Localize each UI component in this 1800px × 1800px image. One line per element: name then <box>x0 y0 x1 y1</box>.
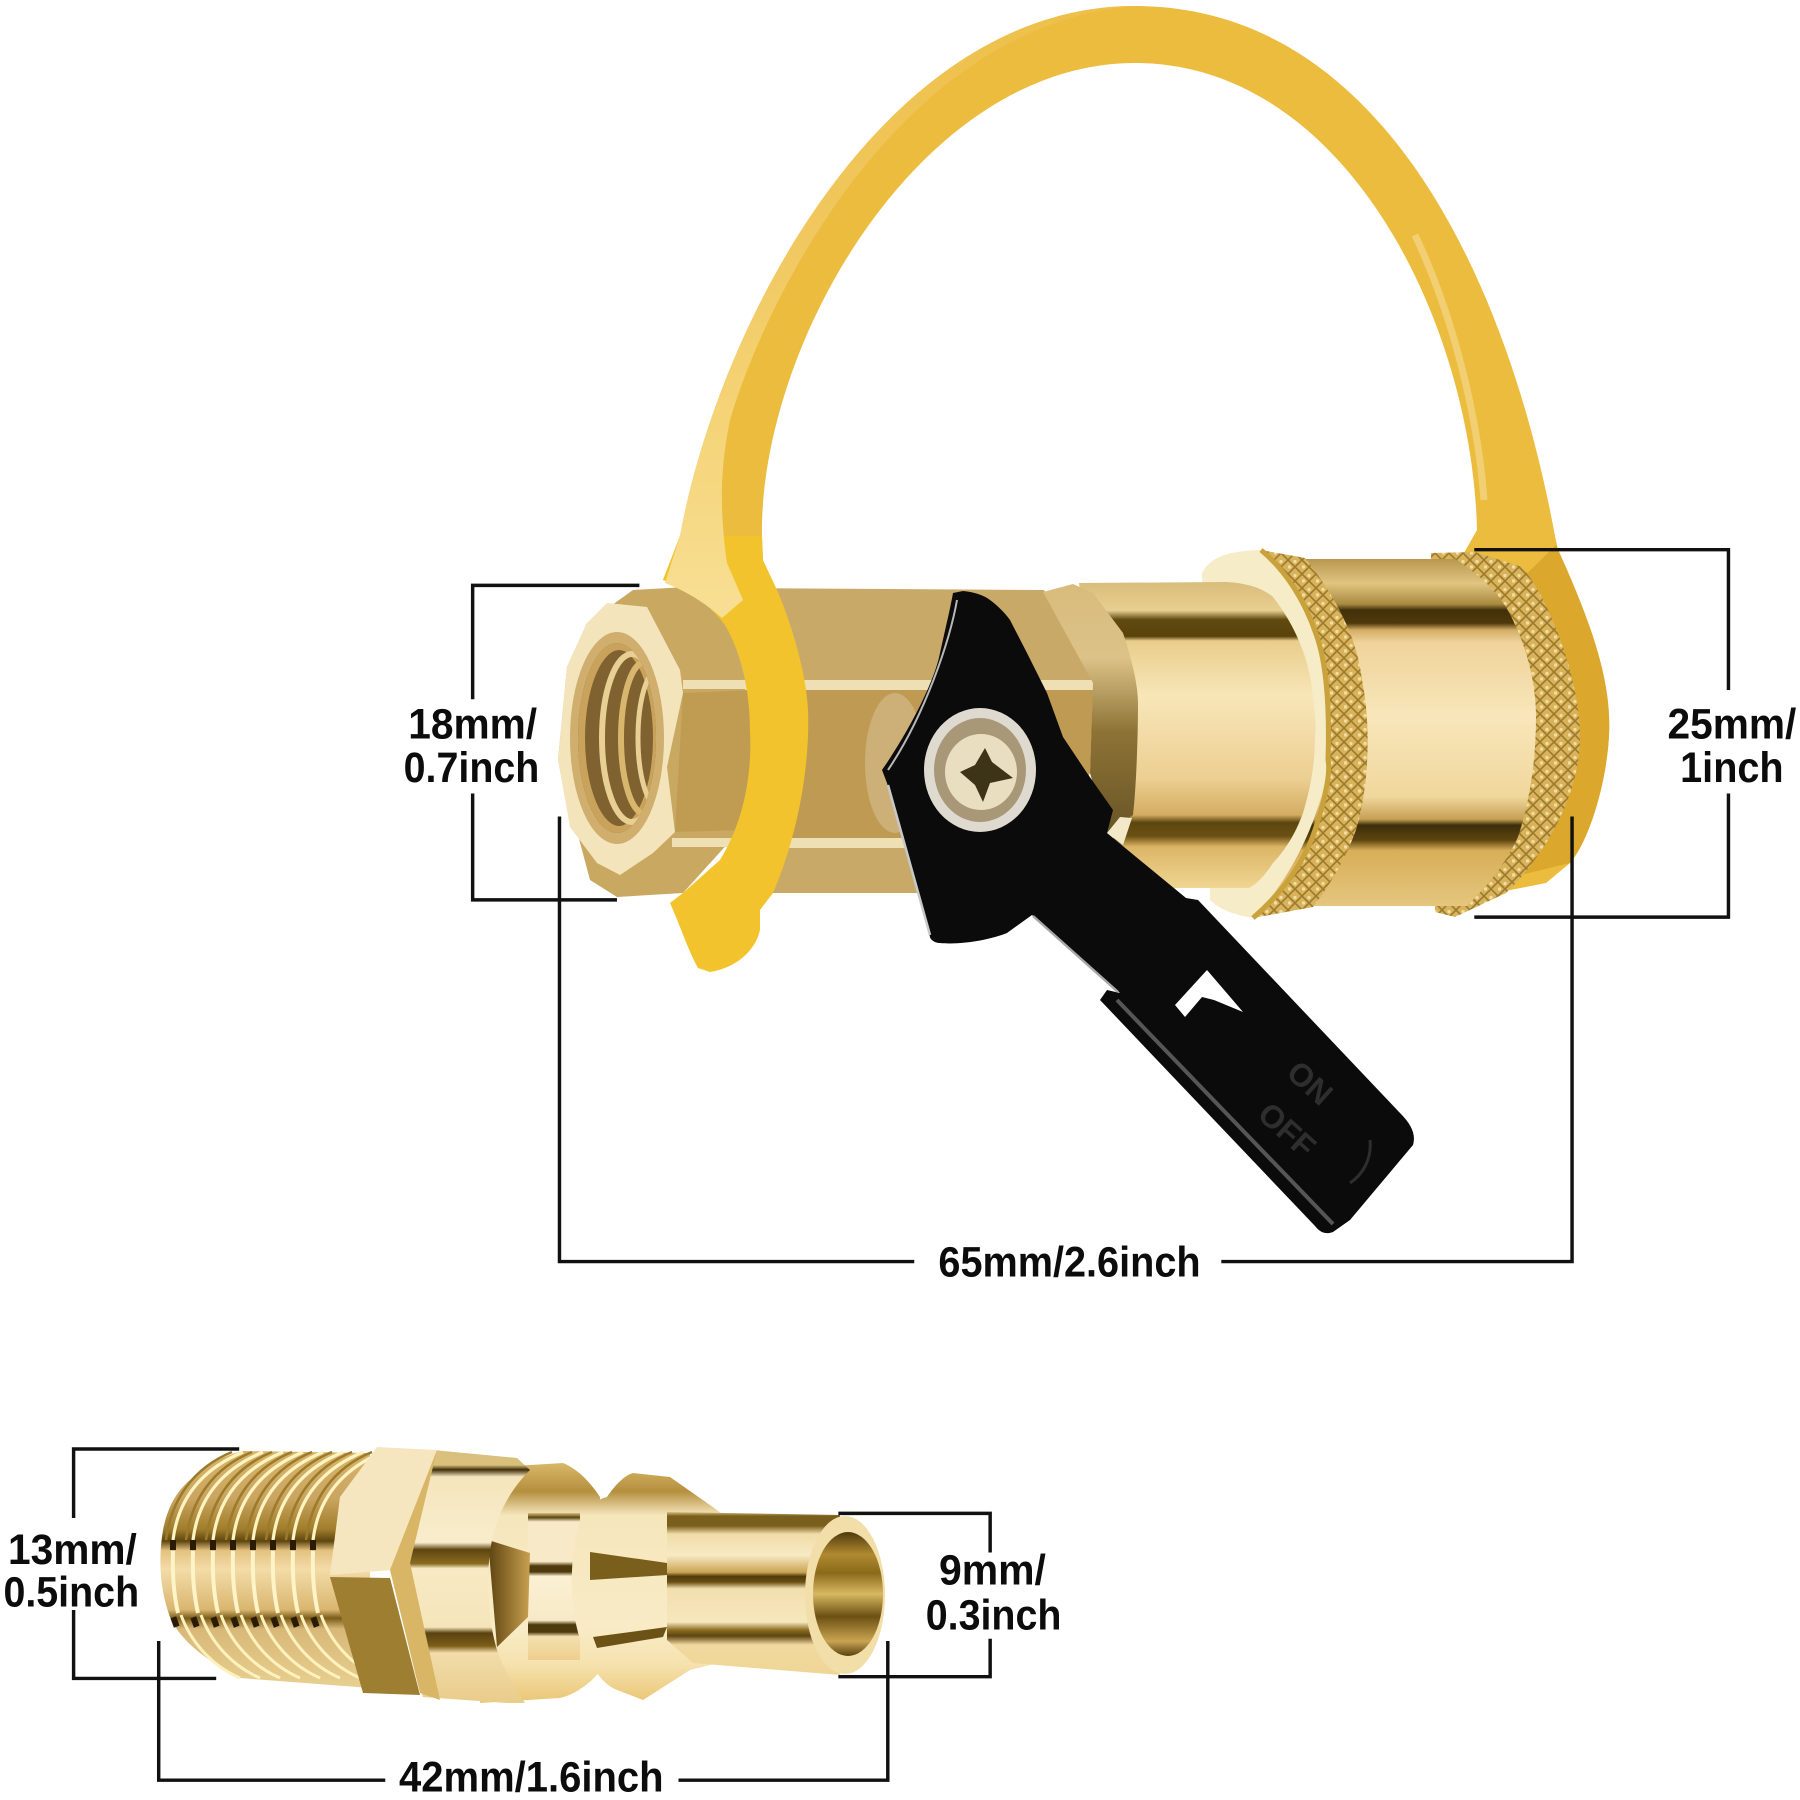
inner dark wedge <box>488 1540 530 1647</box>
yellow loop strap <box>663 6 1609 900</box>
flared shoulder <box>572 1473 730 1700</box>
front coupler cylinder <box>1079 582 1316 888</box>
rear knurled collar <box>1431 552 1580 917</box>
tube end <box>805 1516 885 1674</box>
dimension: 18mm <box>404 585 639 900</box>
lever window <box>1175 970 1243 1017</box>
dimension: 25mm: 25mm/ <box>1667 700 1796 748</box>
dimension: 25mm <box>1474 550 1796 917</box>
dimension: 18mm: 18mm/ <box>408 700 537 748</box>
threaded end <box>160 1451 383 1688</box>
dimension: 9mm: 9mm/ <box>939 1547 1046 1595</box>
nut face <box>558 603 683 875</box>
flare dark wedges <box>590 1552 667 1648</box>
dimension: 25mm: 1inch <box>1680 744 1784 792</box>
dimension: 18mm: 0.7inch <box>404 744 539 792</box>
dimension: 65mm <box>559 816 1572 1286</box>
rear coupler sleeve <box>1250 559 1536 906</box>
hex nut with threaded port <box>558 587 755 897</box>
hex <box>330 1447 440 1700</box>
tube <box>667 1512 840 1675</box>
neck <box>528 1513 580 1660</box>
dimension: 9mm: 0.3inch <box>926 1592 1061 1640</box>
pale outer strip of strap <box>665 6 1135 618</box>
black lever handle <box>882 591 1414 1233</box>
hex valve body <box>730 588 1093 893</box>
front collar pale ring <box>1202 550 1330 918</box>
body collar <box>408 1450 530 1703</box>
bottom brass plug fitting <box>160 1447 885 1703</box>
screw <box>924 708 1036 832</box>
lever engraving <box>1251 1054 1370 1183</box>
dimension: 13mm <box>3 1449 239 1678</box>
dimension: 13mm: 13mm/ <box>8 1526 137 1574</box>
dimension: 42mm <box>159 1641 888 1800</box>
front knurled collar <box>1253 550 1368 918</box>
yellow strap front band and tab <box>663 6 1135 972</box>
lever engraving: ON <box>1280 1054 1340 1112</box>
flange <box>1043 584 1138 845</box>
dimension: 13mm: 0.5inch <box>3 1569 139 1617</box>
dome behind neck <box>480 1463 600 1703</box>
dimension: 65mm: 65mm/2.6inch <box>938 1238 1201 1286</box>
dimension: 9mm <box>838 1513 1061 1677</box>
lever engraving: OFF <box>1251 1095 1323 1165</box>
